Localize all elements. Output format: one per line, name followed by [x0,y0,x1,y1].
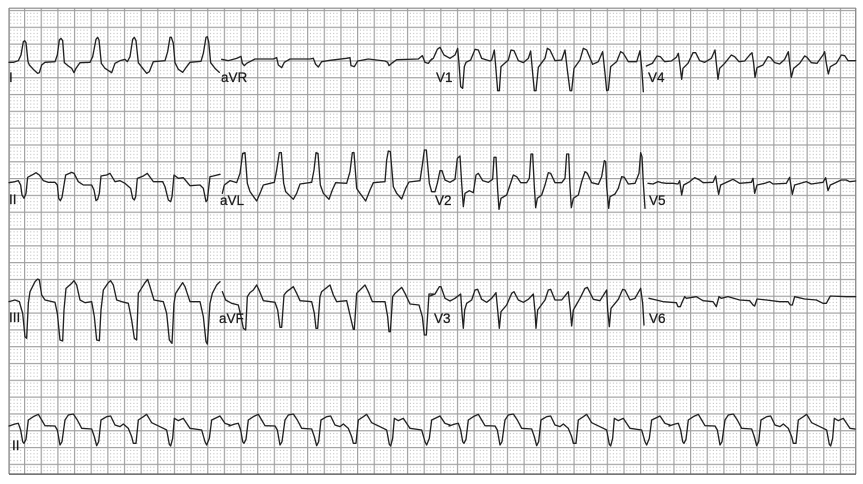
lead label: V2: V2 [435,193,452,208]
lead label: V5: V5 [649,193,666,208]
trace: lead V4 [646,50,856,79]
trace: lead V2 [433,153,645,209]
lead label: rhythm strip II: II [12,438,20,453]
trace: lead V5 [648,176,856,195]
lead label: aVR: aVR [221,70,248,85]
lead label: II: II [9,192,17,207]
lead label: aVL: aVL [220,193,245,208]
trace: lead V1 [430,47,643,92]
lead label: I: I [9,70,13,85]
trace: lead III [9,279,220,344]
trace: lead aVR [222,56,432,68]
trace: lead V3 [430,287,644,328]
trace: rhythm strip lead II [9,414,863,446]
lead label: aVF: aVF [219,311,244,326]
lead label: V4: V4 [648,70,665,85]
trace: lead aVL [222,150,435,201]
trace: lead I [9,37,219,73]
lead label: V6: V6 [649,311,666,326]
trace: lead aVF [222,285,433,335]
trace: lead II [9,172,220,202]
lead label: III: III [9,310,20,325]
lead label: V3: V3 [434,311,451,326]
lead label: V1: V1 [436,70,453,85]
trace: lead V6 [649,296,856,307]
